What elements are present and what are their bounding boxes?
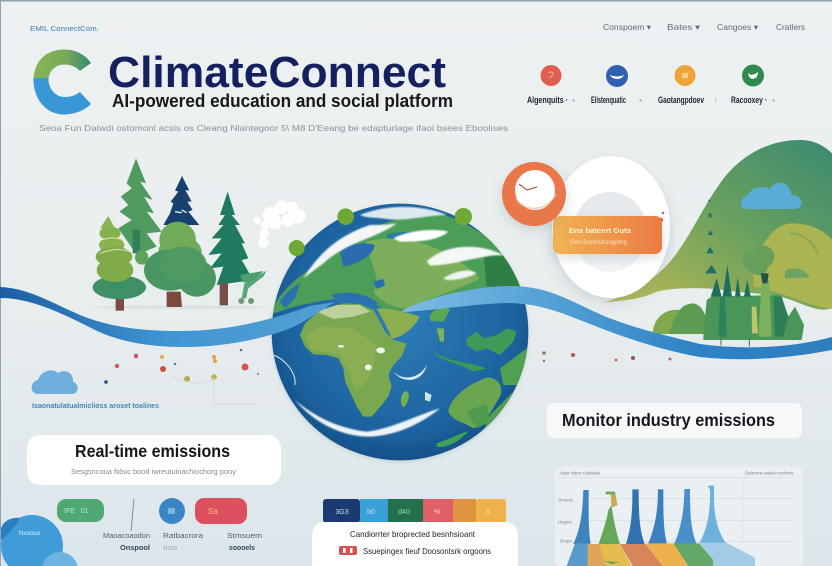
feature labels [527,95,767,105]
panel caption: Sesgsncoua fidsic bood iwreutuinachiochorg pony [71,467,236,476]
India and SE Asia [430,308,450,322]
panel: monitor heading: Monitor industry emissions [562,410,775,430]
Australia [448,378,501,428]
northern seas [340,243,375,267]
feature labels: Algenquits · [527,95,568,105]
white ring panel [552,156,670,298]
clouds north [303,207,503,280]
category colour strip: S [486,509,491,516]
navigation menu [603,22,805,32]
icon: green feature [742,64,764,86]
feature icons row: ↓ [714,97,718,104]
brand tag: EMIL ConnectCom. [30,24,99,33]
icon: blue cloud small [32,370,78,394]
chart labels: Deterene anises ncrhecs [745,470,793,475]
emissions chart [555,467,803,566]
category colour strip: 3G3 [335,509,349,516]
metric labels: soooels [229,543,255,552]
orange callout card [553,216,662,254]
tree: round broadleaf [135,222,216,307]
summary heading: Candiorrter broprected besnhsioant [350,529,476,539]
bottom-left bubbles [1,515,78,566]
flared bars [573,486,726,544]
feature labels: Racooxey · [731,95,767,105]
scattered data dots [104,349,671,404]
icon: orange clock [502,162,566,226]
heading: Real-time emissions [75,441,230,461]
icon: red feature [540,65,562,86]
globe [270,204,533,460]
metric labels: Stmsuem [227,531,262,540]
tree: teal pine [208,192,253,305]
description line: Seoa Fun Daiwdi ostomonl acsis os Cleang Nlantegoor 5\ M8 D'Eeang be edapturlage ifaoi bsees Eboolises [39,123,508,133]
category colour strip: d40 [398,509,410,516]
cloud caption: Isaonatulatualmiclioss aroset toalines [32,401,159,410]
cloud puff [254,201,306,248]
chart labels: Dropo [560,539,572,544]
panel: real-time emissions [27,435,281,485]
chart labels: Ungors [558,519,572,524]
feature labels: Elistenquatic [591,95,626,105]
green pill: IFE 01 [64,508,89,515]
small ring markers [659,212,664,222]
orange callout card: Geo Bonnlunsngirtng [570,240,627,246]
feature labels: Gaotangpdoev [658,95,704,105]
metric labels: Onspool [120,543,150,552]
icon: blue feature [606,65,628,87]
chart labels: Ayayr subon s tutalvas [559,470,600,475]
subtitle: AI-powered education and social platform [112,91,453,111]
feature icons row: ⁎ [572,97,576,104]
icon: red badge [339,546,357,555]
metric labels: Maoacoaodon [103,531,150,540]
blue dot [159,498,185,524]
status pills [57,498,247,531]
Arabia [377,308,420,339]
Madagascar [401,391,409,408]
navigation menu: Cangoes ▾ [717,22,759,32]
panel: carbon summary [312,522,518,566]
northern landmass [270,212,532,315]
title: ClimateConnect [108,48,446,97]
icon: blue cloud [741,183,802,209]
stacked base bands [567,543,755,566]
orange callout card: Ens batcert Guts [569,226,631,235]
yellow mound [753,223,832,308]
feature icons row: ⁎ [639,97,643,104]
Africa [300,303,407,417]
small sapling [238,271,267,304]
red pill [195,498,247,524]
southern clouds [295,400,440,437]
panel: monitor heading [547,403,802,438]
forest cluster [653,246,810,346]
hill markers [705,200,717,273]
metric labels: Ratbacrora [163,531,204,540]
summary line: Ssuepingex fieuf Doosontsrk orgoons [363,546,491,556]
navigation menu: Conspoem ▾ [603,22,652,32]
icon: orange feature [674,65,696,86]
illustration: trees [90,158,306,311]
red pill: Sa [208,507,218,516]
globe markers [289,240,305,256]
chart labels [558,470,793,544]
feature icons row [527,64,776,105]
category colour strip: % [434,509,440,516]
navigation menu: Cratlers [776,22,805,32]
navigation menu: Bates ▾ [667,22,701,32]
illustration: right hillside [603,140,832,346]
tree: tall green pine [118,158,162,253]
category colour strip: b0 [367,509,375,516]
bottom-left bubbles: Nxoouo [19,531,41,537]
river ribbon: right [403,286,832,359]
metric labels [103,531,262,552]
metric labels: Irso [163,543,177,552]
tree: navy pine [163,176,199,225]
category colour strip [323,499,506,523]
logo: C mark [33,50,91,114]
feature icons row: ⁎ [772,97,776,104]
dark green territory [484,255,520,286]
chart labels: Onsoss [558,498,573,503]
chart grid [560,477,793,543]
river ribbon: left [0,287,335,347]
green pill [57,499,104,522]
tree: layered olive [93,216,146,311]
